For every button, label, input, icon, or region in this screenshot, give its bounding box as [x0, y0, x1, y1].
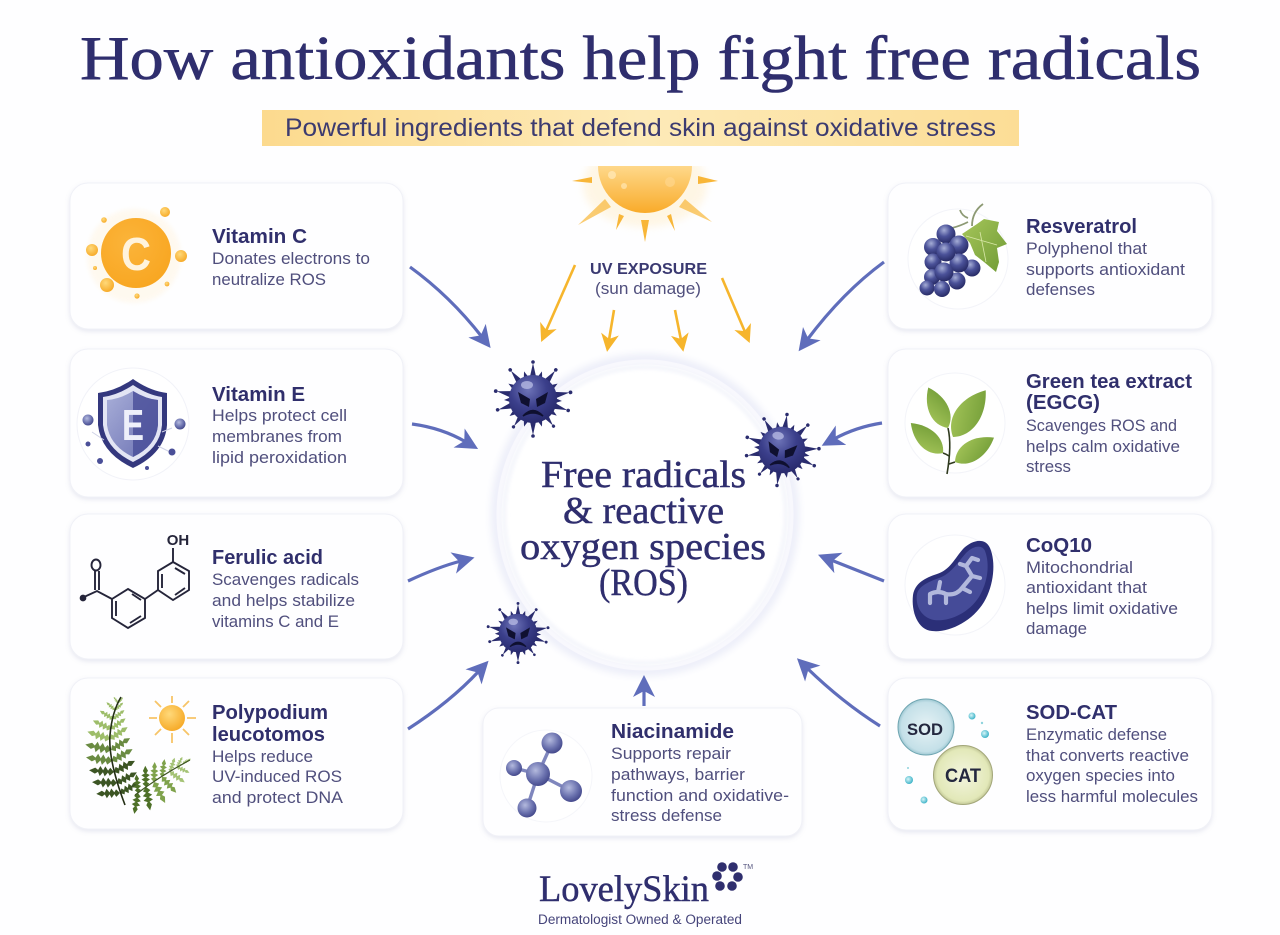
text: Niacinamide: pathways, barrier [611, 766, 746, 784]
text: Vitamin E: Helps protect cell [212, 407, 347, 425]
text: Resveratrol: defenses [1026, 281, 1095, 299]
icon: flower mark [712, 862, 743, 891]
icon: niacinamide molecule [500, 730, 592, 822]
central heading: & reactive [563, 490, 724, 532]
text: Vitamin E: lipid peroxidation [212, 449, 347, 467]
icon: ferulic acid molecule: OH [167, 532, 189, 549]
panel: SOD-CAT [888, 678, 1212, 830]
text: Resveratrol: supports antioxidant [1026, 261, 1185, 279]
text: Green tea extract [1026, 371, 1192, 476]
text: SOD-CAT: that converts reactive [1026, 747, 1189, 765]
text: CoQ10: Mitochondrial [1026, 559, 1133, 577]
panel: Ferulic acid [70, 514, 403, 659]
text: Green tea extract: helps calm oxidative [1026, 438, 1180, 456]
text: Vitamin C: Donates electrons to [212, 250, 370, 268]
UV exposure label: UV EXPOSURE [590, 261, 707, 278]
panel: Niacinamide [483, 708, 802, 836]
central heading: Free radicals [541, 454, 746, 496]
icon: sun [572, 166, 718, 242]
text: Polypodium leucotomos: Polypodium [212, 702, 328, 724]
text: CoQ10: damage [1026, 620, 1087, 638]
central heading: (ROS) [599, 562, 688, 604]
text: Ferulic acid: and helps stabilize [212, 592, 355, 610]
subtitle banner [262, 110, 1019, 146]
arrows: antioxidants to centre [408, 262, 884, 729]
text: Polypodium leucotomos: leucotomos [212, 724, 325, 746]
text: Vitamin C: neutralize ROS [212, 271, 326, 289]
text: Vitamin E: membranes from [212, 428, 342, 446]
logo: LovelySkin: Dermatologist Owned & Operated [538, 912, 742, 927]
panel: Resveratrol [888, 183, 1212, 329]
arrows: UV rays to centre [546, 265, 745, 340]
text: Niacinamide: stress defense [611, 807, 722, 825]
icon: small sun [149, 696, 196, 743]
icon: free radical right [738, 407, 826, 493]
text: Polypodium leucotomos [212, 702, 343, 807]
text: Ferulic acid: vitamins C and E [212, 613, 339, 631]
text: Ferulic acid: Ferulic acid [212, 547, 323, 569]
icon: mitochondrion [905, 535, 1005, 635]
text: Vitamin E [212, 384, 347, 467]
text: Green tea extract: stress [1026, 458, 1071, 476]
panel: Vitamin E [70, 349, 403, 497]
icon: SOD and CAT enzymes: SOD [907, 720, 943, 739]
logo: LovelySkin [538, 862, 753, 927]
UV exposure label: (sun damage) [595, 280, 701, 298]
text: Niacinamide [611, 721, 789, 825]
text: Resveratrol: Polyphenol that [1026, 240, 1147, 258]
panel: CoQ10 [888, 514, 1212, 659]
panel: Vitamin C [70, 183, 403, 329]
icon: free radical top left [493, 360, 573, 438]
icon: fern [84, 696, 192, 815]
text: Niacinamide: function and oxidative- [611, 787, 789, 805]
text: Green tea extract: Scavenges ROS and [1026, 417, 1177, 435]
logo: LovelySkin: LovelySkin [539, 869, 709, 910]
text: SOD-CAT: Enzymatic defense [1026, 726, 1167, 744]
icon: grapes [908, 204, 1008, 309]
text: SOD-CAT: oxygen species into [1026, 767, 1175, 785]
text: Niacinamide: Supports repair [611, 745, 732, 763]
central ROS ring [496, 359, 794, 671]
icon: SOD and CAT enzymes: CAT [945, 766, 981, 787]
text: Polypodium leucotomos: Helps reduce [212, 748, 313, 766]
icon: green tea leaves [904, 373, 1005, 474]
text: Vitamin E: Vitamin E [212, 384, 305, 406]
text: CoQ10 [1026, 535, 1178, 638]
icon: free radical lower left [486, 602, 550, 664]
text: Green tea extract: (EGCG) [1026, 392, 1100, 414]
UV exposure label [590, 261, 707, 298]
text: CoQ10: antioxidant that [1026, 579, 1147, 597]
text: Vitamin C: Vitamin C [212, 226, 307, 248]
central heading: oxygen species [520, 526, 766, 568]
text: Polypodium leucotomos: UV-induced ROS [212, 768, 342, 786]
text: CoQ10: CoQ10 [1026, 535, 1092, 557]
icon: Vitamin E shield: E [122, 401, 144, 450]
text: Ferulic acid [212, 547, 359, 631]
icon: vitamin C: C [121, 228, 151, 280]
central heading [520, 454, 766, 604]
text: Niacinamide: Niacinamide [611, 721, 734, 743]
title: How antioxidants help fight free radicals [80, 25, 1201, 93]
text: SOD-CAT [1026, 702, 1198, 806]
icon: ferulic acid molecule [81, 532, 189, 628]
logo: LovelySkin: TM [743, 864, 753, 871]
panel: Green tea extract [888, 349, 1212, 497]
text: CoQ10: helps limit oxidative [1026, 600, 1178, 618]
text: Green tea extract: Green tea extract [1026, 371, 1192, 393]
icon: SOD and CAT enzymes [898, 699, 992, 804]
text: Resveratrol [1026, 216, 1185, 299]
text: Polypodium leucotomos: and protect DNA [212, 789, 343, 807]
text: SOD-CAT: less harmful molecules [1026, 788, 1198, 806]
subtitle banner: Powerful ingredients that defend skin against oxidative stress [285, 114, 996, 142]
panel: Polypodium leucotomos [70, 678, 403, 829]
text: Ferulic acid: Scavenges radicals [212, 571, 359, 589]
icon: vitamin C [86, 207, 187, 303]
text: Resveratrol: Resveratrol [1026, 216, 1137, 238]
icon: Vitamin E shield [77, 368, 189, 480]
text: SOD-CAT: SOD-CAT [1026, 702, 1117, 724]
text: Vitamin C [212, 226, 370, 289]
